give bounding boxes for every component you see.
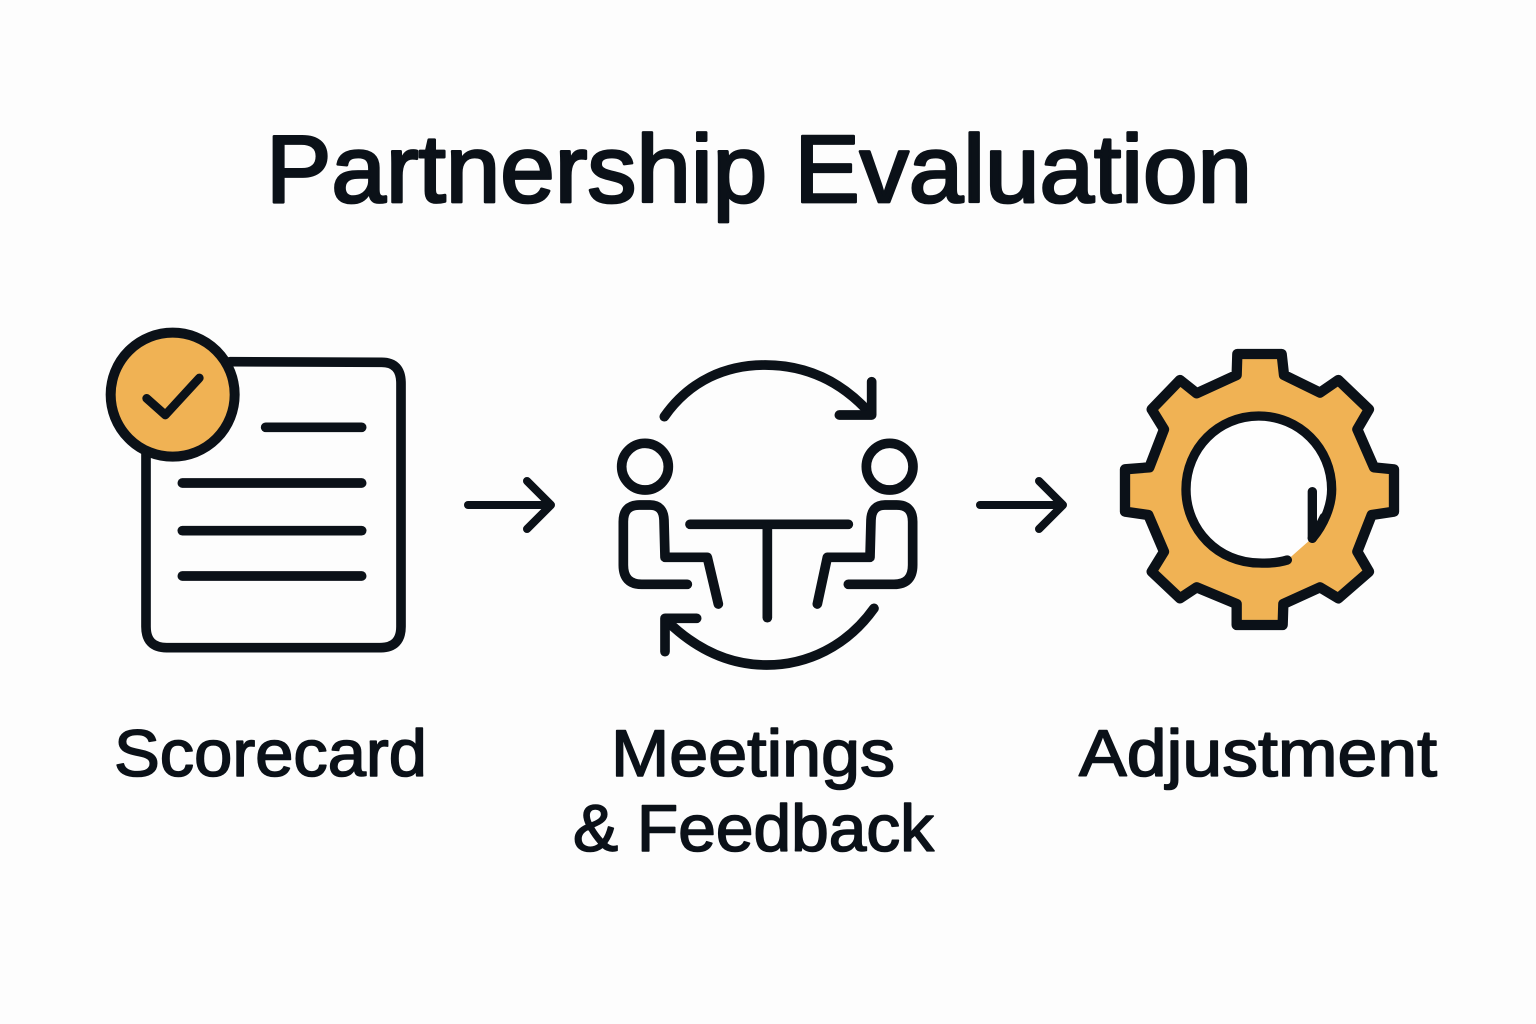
document outline <box>146 362 401 648</box>
label: meetings and feedback: & Feedback <box>573 791 935 865</box>
document text lines <box>182 427 362 576</box>
icon: scorecard document with check badge <box>111 333 401 648</box>
title: Partnership Evaluation <box>266 116 1252 223</box>
table <box>690 524 848 618</box>
check badge <box>111 333 235 457</box>
label: adjustment: Adjustment <box>1079 716 1437 790</box>
bottom cycle arrow <box>665 608 874 665</box>
gear body <box>1125 354 1394 625</box>
icon: meeting with feedback loop <box>622 365 913 665</box>
top cycle arrow <box>664 365 872 417</box>
right person <box>817 443 913 604</box>
label: meetings and feedback <box>573 716 935 865</box>
arrow: scorecard to meetings <box>468 481 551 529</box>
label: scorecard: Scorecard <box>114 716 427 790</box>
left person <box>622 443 718 604</box>
label: meetings and feedback: Meetings <box>611 716 895 790</box>
circular adjustment arrow <box>1186 416 1332 563</box>
gear centre <box>1186 416 1332 563</box>
icon: adjustment gear <box>1125 354 1394 625</box>
arrow: meetings to adjustment <box>980 481 1063 529</box>
